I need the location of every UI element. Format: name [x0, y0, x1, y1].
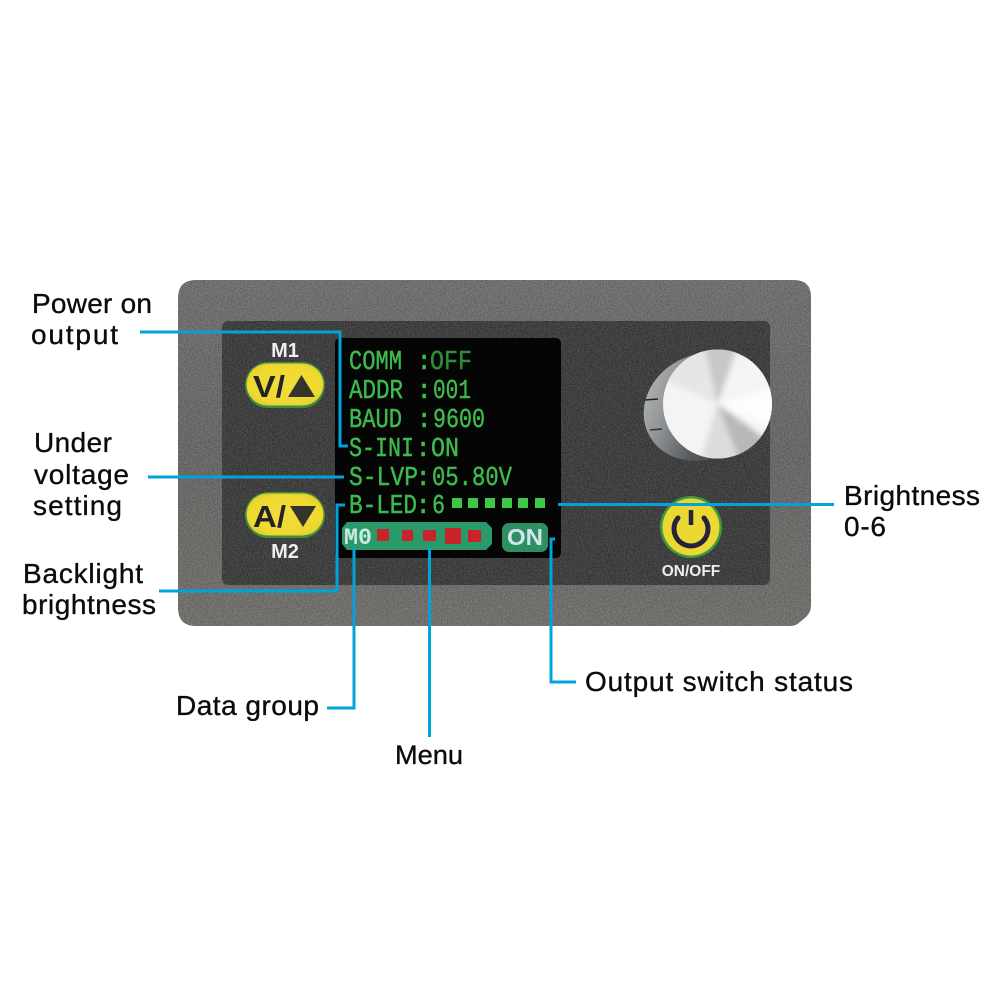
label: Backlight brightness [22, 558, 156, 620]
label: Under voltage setting: Under [34, 427, 112, 458]
leader line: output switch status [551, 539, 576, 682]
leader line: brightness [558, 503, 834, 506]
leader line: under voltage setting [148, 476, 344, 478]
label: Backlight brightness: Backlight [23, 558, 143, 589]
settings rows: : [415, 464, 431, 494]
leader line: data group [327, 547, 354, 708]
label: Backlight brightness: brightness [22, 589, 156, 620]
outer frame [178, 280, 811, 626]
settings rows: BAUD [349, 406, 402, 436]
label: Output switch status: Output switch status [585, 666, 853, 697]
settings rows: : [416, 406, 432, 436]
settings rows: ADDR [349, 377, 403, 407]
screen background [335, 338, 561, 558]
settings rows: : [416, 348, 432, 378]
button: V/up with M1 label: V/ [253, 369, 285, 404]
label: Brightness 0-6: Brightness [844, 480, 980, 511]
label: Power on output: output [31, 319, 118, 350]
settings rows: : [416, 377, 432, 407]
inner dark panel [222, 321, 770, 585]
settings rows: 05.80V [432, 464, 513, 494]
label: Power on output: Power on [32, 288, 152, 319]
label: Data group: Data group [176, 690, 319, 721]
rotary knob [644, 350, 772, 461]
settings rows: ON [431, 435, 459, 465]
menu status bar [342, 522, 492, 551]
label: Under voltage setting: setting [33, 490, 122, 521]
ON status badge: ON [507, 524, 543, 550]
settings rows: COMM [349, 348, 402, 378]
settings rows: 001 [433, 377, 471, 407]
settings rows: S-INI [349, 435, 414, 465]
button: A/down with M2 label: A/ [253, 499, 286, 534]
settings rows: B-LED [349, 492, 417, 522]
label: Brightness 0-6: 0-6 [844, 511, 886, 542]
leader line: backlight brightness [159, 505, 345, 591]
settings rows [349, 348, 513, 522]
power button with ON/OFF label [660, 496, 722, 580]
label: Power on output [31, 288, 152, 350]
label: Menu: Menu [395, 740, 463, 770]
settings rows: OFF [430, 348, 472, 378]
button: V/up with M1 label [245, 340, 325, 408]
label: Brightness 0-6 [844, 480, 980, 542]
ON status badge [502, 523, 548, 552]
brightness level squares [452, 498, 545, 508]
label: Under voltage setting [33, 427, 129, 521]
settings rows: S-LVP [349, 464, 418, 494]
leader line: menu [428, 547, 431, 737]
menu status bar: M0 [344, 525, 372, 551]
power button with ON/OFF label: ON/OFF [662, 563, 720, 580]
button: V/up with M1 label: M1 [271, 340, 299, 362]
settings rows: : [415, 435, 431, 465]
button: A/down with M2 label: M2 [271, 541, 299, 563]
label: Under voltage setting: voltage [34, 459, 129, 490]
settings rows: : [415, 492, 431, 522]
device body [178, 280, 811, 626]
settings rows: 9600 [433, 406, 485, 436]
leader line: power on output [140, 332, 348, 446]
display screen [335, 338, 561, 558]
settings rows: 6 [432, 492, 445, 522]
button: A/down with M2 label [245, 492, 325, 563]
